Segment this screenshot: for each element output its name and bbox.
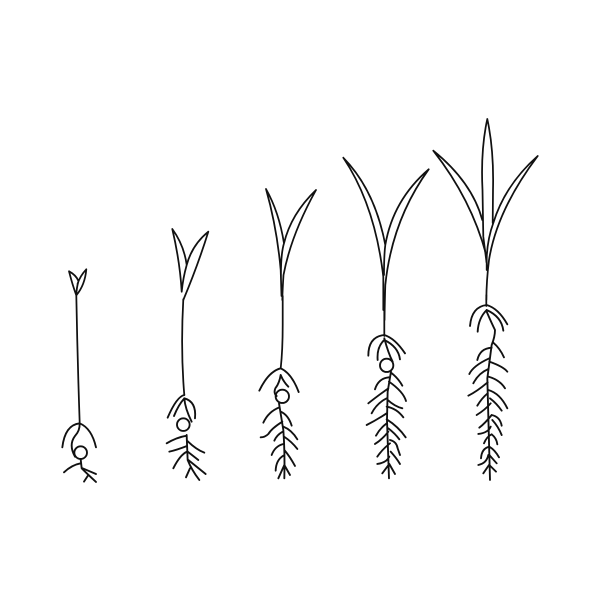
leaves: stage 4 bbox=[343, 158, 429, 320]
roots: stage 3 bbox=[259, 368, 299, 478]
roots: stage 4 bbox=[367, 335, 406, 478]
plant: stage 4 bbox=[343, 158, 429, 478]
plant: stage 1 bbox=[62, 269, 96, 482]
plant: stage 5 bbox=[433, 119, 538, 480]
stem: stage 4 bbox=[383, 310, 385, 336]
roots: stage 1 bbox=[62, 423, 96, 482]
stem: stage 5 bbox=[485, 295, 487, 306]
seed: stage 3 bbox=[276, 390, 289, 403]
roots: stage 5 bbox=[468, 305, 507, 480]
leaves: stage 5 bbox=[433, 119, 538, 300]
leaves: stage 2 bbox=[172, 229, 208, 300]
stem: stage 1 bbox=[76, 295, 80, 423]
seed: stage 2 bbox=[177, 418, 190, 431]
seed: stage 1 bbox=[74, 446, 87, 459]
plant: stage 2 bbox=[167, 229, 208, 480]
roots: stage 2 bbox=[167, 395, 206, 480]
leaves: stage 1 bbox=[69, 269, 86, 295]
stem: stage 3 bbox=[281, 296, 283, 368]
leaves: stage 3 bbox=[266, 189, 316, 300]
plant: stage 3 bbox=[259, 189, 316, 478]
seed: stage 4 bbox=[380, 359, 393, 372]
stem: stage 2 bbox=[182, 299, 184, 395]
